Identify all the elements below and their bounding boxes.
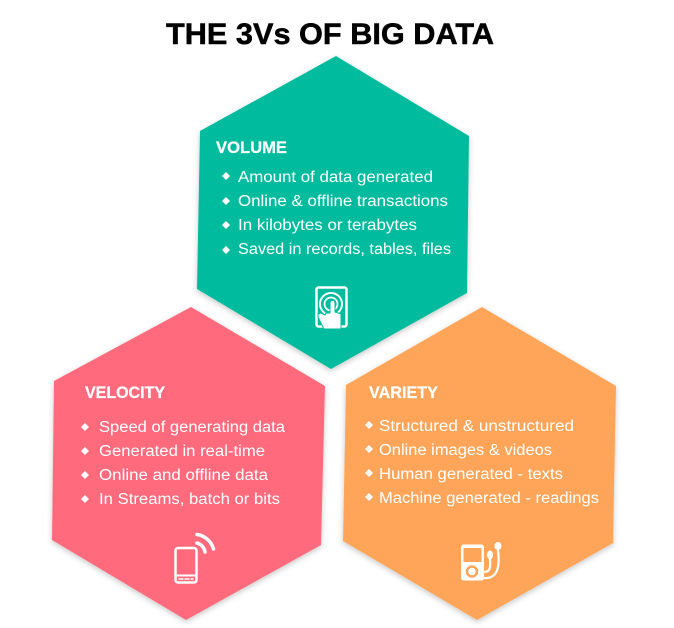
title: THE 3Vs OF BIG DATA (166, 18, 494, 51)
velocity bullet list: Online and offline data (99, 467, 268, 484)
velocity bullet list: Generated in real-time (99, 443, 265, 460)
icon: tablet touch (316, 288, 346, 329)
variety heading: VARIETY (369, 384, 438, 402)
variety bullet list: Human generated - texts (379, 466, 563, 483)
velocity bullet list: In Streams, batch or bits (99, 491, 280, 508)
variety bullet list: Machine generated - readings (379, 490, 599, 507)
variety bullet list: Structured & unstructured (379, 418, 574, 435)
volume bullet list: In kilobytes or terabytes (238, 217, 417, 234)
icon: smartphone with signal (176, 534, 214, 582)
volume bullet list (222, 169, 451, 258)
panel: variety (343, 307, 616, 620)
variety bullet list (365, 418, 599, 507)
icon: music player with earphones (461, 542, 502, 580)
volume bullet list: Amount of data generated (238, 169, 433, 186)
panel: volume (197, 56, 469, 369)
velocity bullet list (81, 419, 285, 508)
velocity hexagon (52, 307, 325, 620)
volume heading: VOLUME (216, 139, 287, 157)
velocity bullet list: Speed of generating data (99, 419, 285, 436)
volume bullet list: Saved in records, tables, files (238, 241, 451, 258)
panel: velocity (52, 307, 325, 620)
velocity heading: VELOCITY (85, 384, 165, 402)
volume bullet list: Online & offline transactions (238, 193, 448, 210)
variety bullet list: Online images & videos (379, 442, 552, 459)
variety hexagon (343, 307, 616, 620)
volume hexagon (197, 56, 469, 369)
